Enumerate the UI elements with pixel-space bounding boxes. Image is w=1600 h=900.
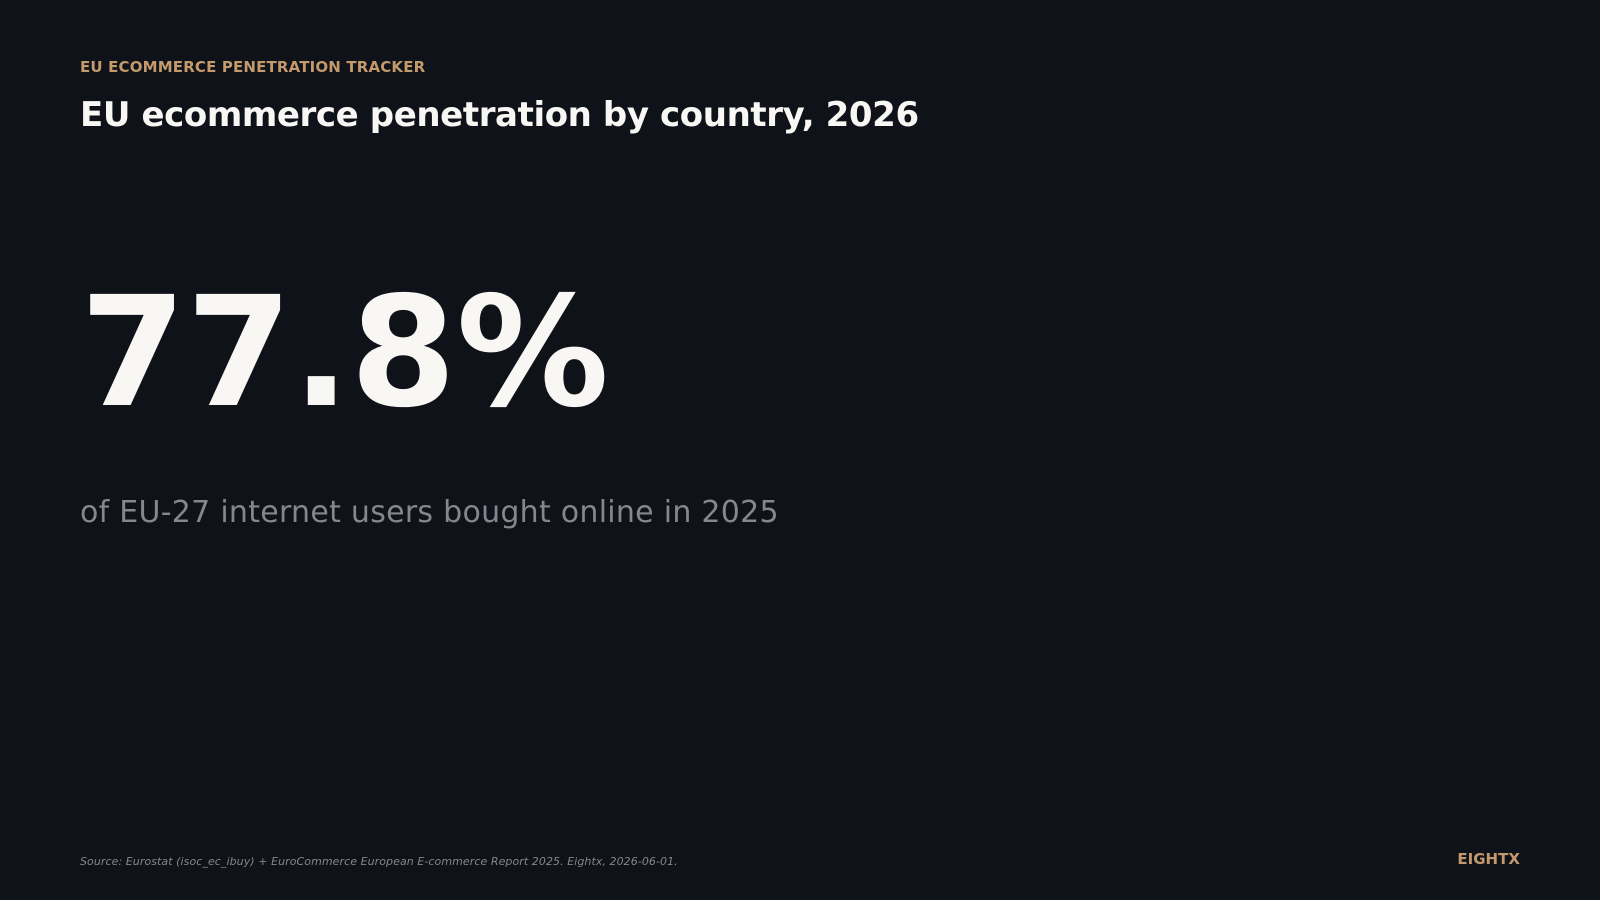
source note: Source: Eurostat (isoc_ec_ibuy) + EuroCommerce European E-commerce Report 2025. Eightx, 2026-06-01.	[80, 855, 678, 868]
big number: 77.8%	[80, 263, 609, 441]
subtitle: of EU-27 internet users bought online in 2025	[80, 495, 779, 530]
title: EU ecommerce penetration by country, 2026	[80, 95, 919, 135]
brand mark: EIGHTX	[1457, 850, 1520, 868]
eyebrow heading: EU ECOMMERCE PENETRATION TRACKER	[80, 58, 425, 76]
